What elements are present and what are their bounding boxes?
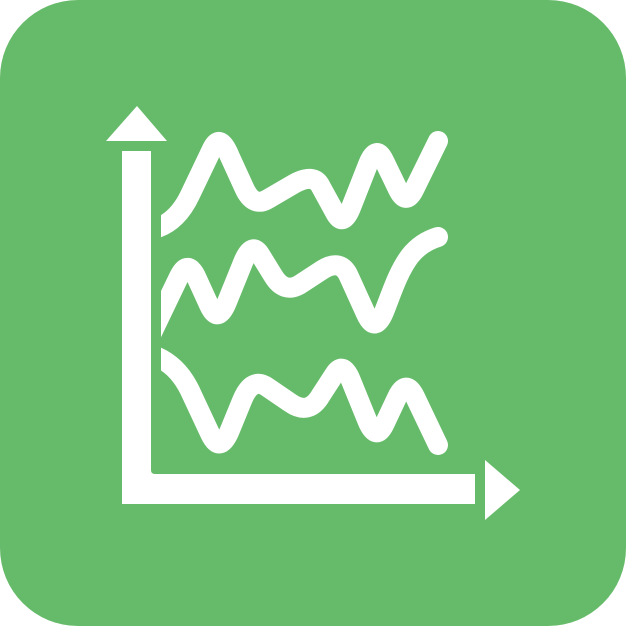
- arrow: y axis: [106, 106, 167, 141]
- line 1: [150, 141, 438, 230]
- line 3: [150, 354, 438, 445]
- data lines: [150, 141, 438, 445]
- line 2: [150, 237, 438, 337]
- chart axes: [106, 106, 475, 504]
- arrow: x axis: [485, 460, 520, 520]
